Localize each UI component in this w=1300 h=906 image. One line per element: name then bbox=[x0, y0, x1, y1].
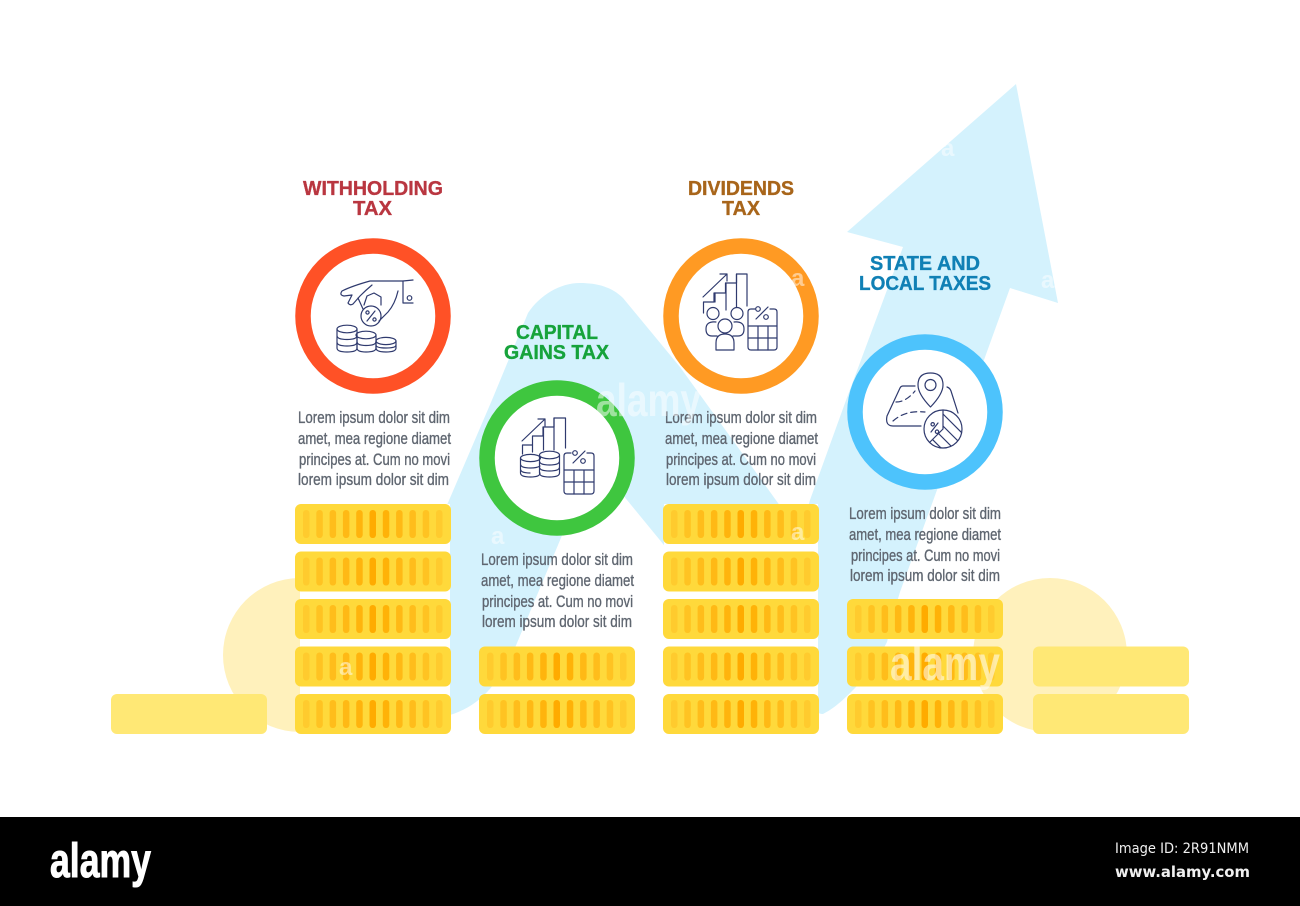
ring: dividends tax bbox=[671, 246, 811, 386]
watermark: small marks: a bbox=[791, 265, 805, 292]
text block: state and local taxes: Lorem ipsum dolor sit dim bbox=[849, 505, 1001, 523]
ring: withholding tax bbox=[303, 246, 443, 386]
heading: withholding tax: TAX bbox=[353, 197, 392, 220]
coin stack 2 bbox=[479, 646, 635, 734]
icon: map with pin and pie chart bbox=[886, 372, 963, 449]
background: growth arrow bbox=[445, 84, 1058, 715]
text block: dividends tax: principes at. Cum no movi bbox=[666, 451, 816, 469]
heading: dividends tax: DIVIDENDS bbox=[688, 177, 794, 200]
text block: capital gains tax: lorem ipsum dolor sit dim bbox=[482, 613, 632, 631]
coin stack 3 bbox=[663, 504, 819, 734]
footer: website: www.alamy.com bbox=[1115, 863, 1250, 881]
pale coin left bbox=[111, 694, 267, 734]
pale coins right bbox=[1033, 646, 1189, 734]
icon: hand dropping percent coin onto stacks bbox=[337, 280, 413, 352]
ring: capital gains tax bbox=[487, 388, 627, 528]
heading: state and local taxes: LOCAL TAXES bbox=[859, 272, 991, 295]
text block: state and local taxes: amet, mea regione diamet bbox=[849, 526, 1001, 544]
watermark: small marks: a bbox=[791, 519, 805, 546]
text block: withholding tax: amet, mea regione diamet bbox=[298, 430, 451, 448]
text block: capital gains tax bbox=[481, 551, 634, 631]
text block: capital gains tax: principes at. Cum no movi bbox=[482, 593, 633, 611]
watermark: small marks bbox=[339, 135, 1055, 681]
icon: chart with coins and calculator bbox=[520, 418, 594, 494]
coin stack 4 bbox=[847, 599, 1003, 734]
watermark: small marks: a bbox=[339, 654, 353, 681]
watermark: small marks: a bbox=[491, 523, 505, 550]
footer: alamy logo: alamy bbox=[50, 835, 151, 888]
coin stack 1 bbox=[295, 504, 451, 734]
footer: image id: Image ID: 2R91NMM bbox=[1115, 841, 1249, 857]
text block: dividends tax bbox=[665, 409, 818, 489]
white backing behind first stack bbox=[300, 504, 450, 736]
watermark: lower right: alamy bbox=[890, 638, 1000, 691]
heading: state and local taxes: STATE AND bbox=[870, 252, 980, 275]
icon: chart with people and calculator bbox=[703, 274, 777, 350]
heading: capital gains tax bbox=[504, 321, 609, 364]
heading: state and local taxes bbox=[859, 252, 991, 295]
heading: withholding tax: WITHHOLDING bbox=[303, 177, 443, 200]
background: pale circle left bbox=[223, 578, 300, 732]
ring: state and local taxes bbox=[855, 342, 995, 482]
heading: dividends tax: TAX bbox=[722, 197, 760, 220]
text block: dividends tax: Lorem ipsum dolor sit dim bbox=[665, 409, 817, 427]
heading: dividends tax bbox=[688, 177, 794, 220]
text block: capital gains tax: amet, mea regione diamet bbox=[481, 572, 634, 590]
text block: state and local taxes: lorem ipsum dolor sit dim bbox=[850, 567, 1000, 585]
text block: dividends tax: amet, mea regione diamet bbox=[665, 430, 818, 448]
footer: black band bbox=[0, 817, 1300, 906]
watermark: small marks: a bbox=[941, 135, 955, 162]
text block: capital gains tax: Lorem ipsum dolor sit dim bbox=[481, 551, 633, 569]
text block: withholding tax: principes at. Cum no movi bbox=[299, 451, 450, 469]
heading: capital gains tax: GAINS TAX bbox=[504, 341, 609, 364]
watermark: centre: alamy bbox=[596, 374, 701, 426]
heading: capital gains tax: CAPITAL bbox=[516, 321, 598, 344]
watermark: small marks: a bbox=[1041, 267, 1055, 294]
text block: state and local taxes bbox=[849, 505, 1001, 585]
text block: withholding tax: lorem ipsum dolor sit dim bbox=[298, 471, 449, 489]
text block: dividends tax: lorem ipsum dolor sit dim bbox=[666, 471, 816, 489]
background: pale circle right bbox=[973, 578, 1127, 732]
text block: state and local taxes: principes at. Cum no movi bbox=[851, 547, 1000, 565]
text block: withholding tax bbox=[298, 409, 451, 489]
white backing behind third stack bbox=[664, 504, 818, 736]
heading: withholding tax bbox=[303, 177, 443, 220]
text block: withholding tax: Lorem ipsum dolor sit dim bbox=[298, 409, 450, 427]
